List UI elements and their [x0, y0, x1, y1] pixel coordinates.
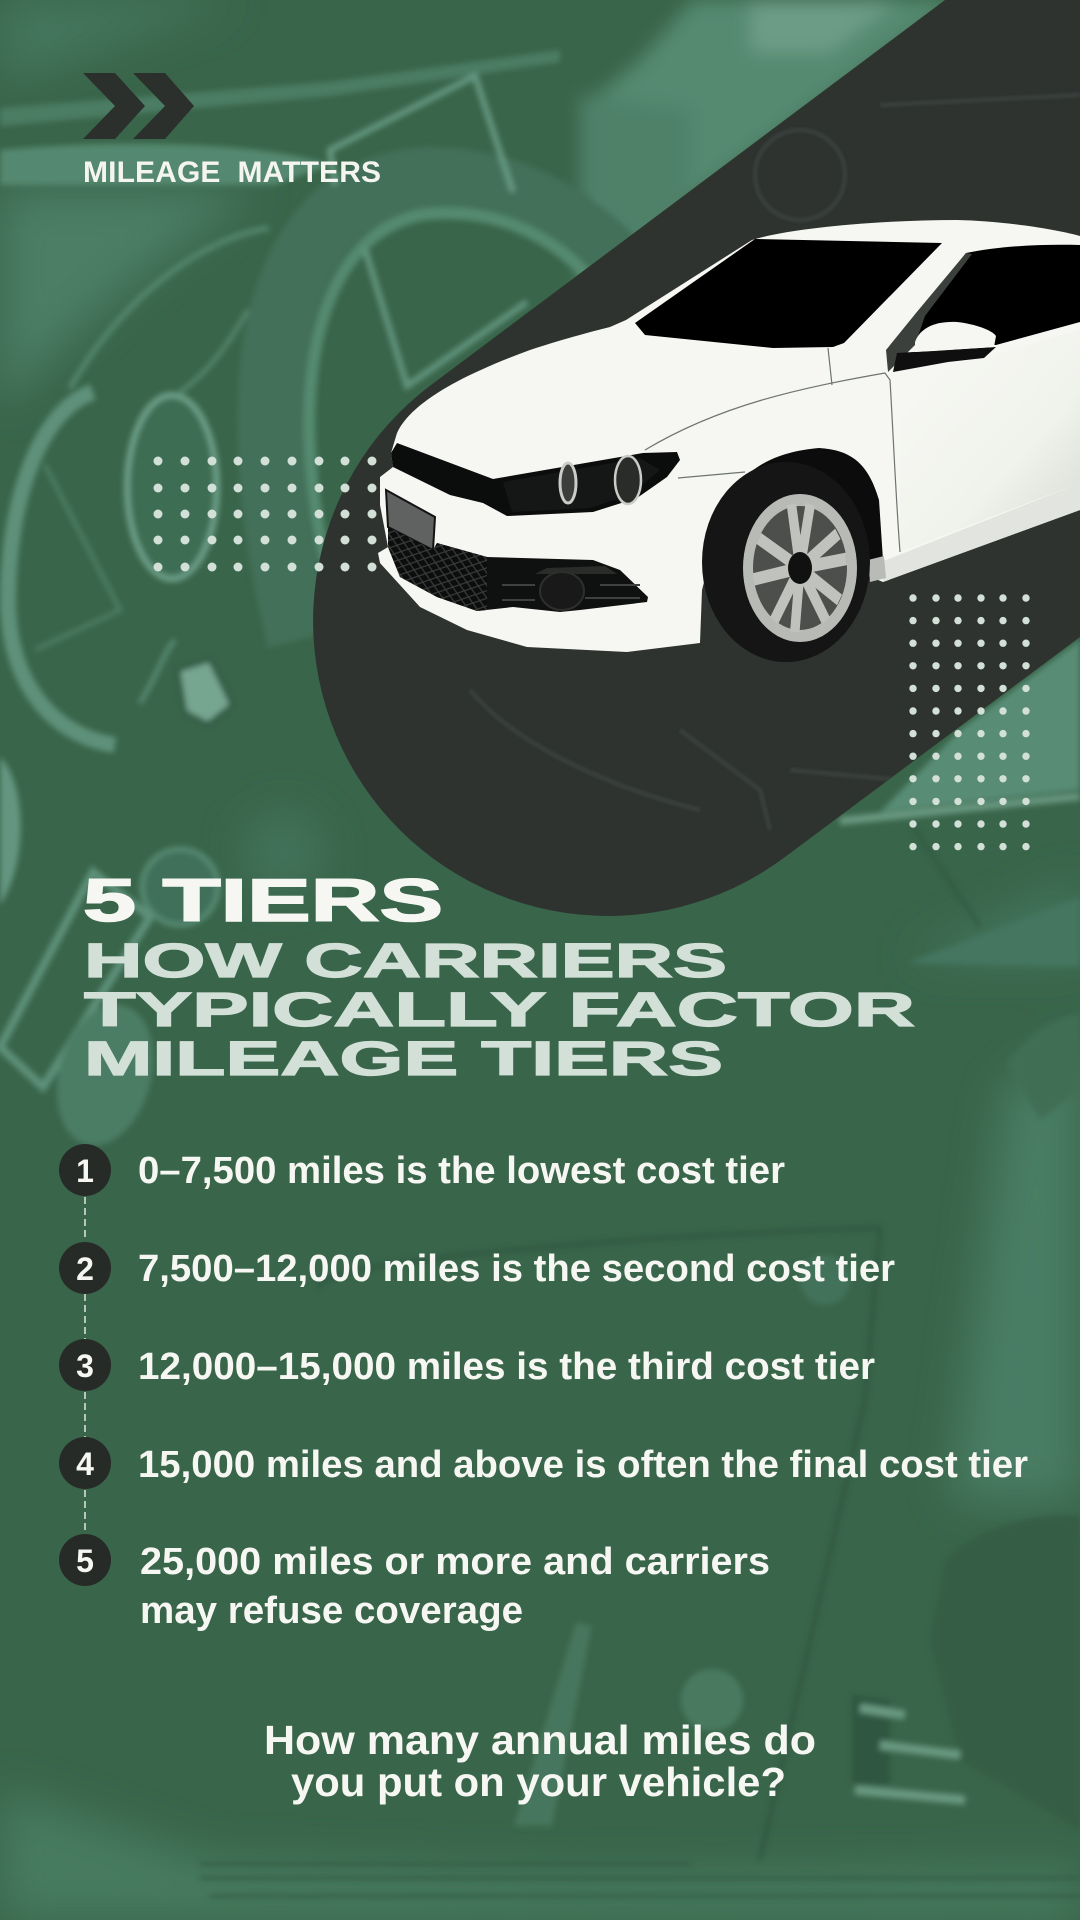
steering wheel	[270, 180, 640, 640]
tier 5: 25,000 miles or more and carriers	[140, 1541, 770, 1583]
tier 4: 15,000 miles and above is often the final cost tier	[138, 1444, 1028, 1486]
hood bar and headlight	[391, 443, 680, 516]
tyre	[702, 462, 870, 662]
wheel arch	[720, 448, 884, 610]
logo wordmark: MILEAGE MATTERS	[83, 156, 381, 189]
logo: double chevron	[83, 73, 194, 139]
tier 1: 0–7,500 miles is the lowest cost tier	[138, 1150, 785, 1192]
tier 2: 2	[76, 1251, 94, 1287]
cluster display	[35, 465, 120, 650]
gauge	[127, 395, 217, 579]
subheading: TYPICALLY FACTOR	[84, 984, 915, 1037]
closing question: How many annual miles do	[264, 1717, 816, 1763]
sill highlight	[881, 483, 1080, 582]
dot grid: left	[154, 456, 376, 572]
white car illustration	[378, 220, 1080, 662]
mud flap	[868, 556, 886, 582]
right vent wedge	[880, 640, 1080, 812]
dark diagonal capsule shape	[313, 0, 1080, 916]
tier 4: 4	[76, 1446, 94, 1482]
gauge hood crescent	[8, 392, 115, 745]
tier 3: 12,000–15,000 miles is the third cost tier	[138, 1346, 875, 1388]
top right console	[580, 0, 960, 300]
car body	[378, 220, 1080, 652]
knob	[178, 660, 232, 724]
tier 5	[59, 1534, 770, 1632]
window frame and pillar	[886, 253, 972, 372]
subheading	[84, 935, 915, 1086]
closing question	[264, 1717, 816, 1805]
dials	[142, 849, 218, 925]
subheading: HOW CARRIERS	[84, 935, 727, 988]
left oval	[0, 757, 21, 905]
subheading: MILEAGE TIERS	[84, 1033, 723, 1086]
tier 3: 3	[76, 1348, 94, 1384]
tier 5: may refuse coverage	[140, 1590, 523, 1632]
timeline connector	[84, 1197, 86, 1534]
dot grid: right	[909, 594, 1030, 850]
tier 5: 5	[76, 1543, 94, 1579]
mirror	[893, 347, 996, 372]
tier 1: 1	[76, 1153, 94, 1189]
lower grille and fog lamp	[388, 527, 648, 612]
door shading	[900, 330, 1080, 552]
side window	[915, 245, 1080, 345]
seat and floor	[1007, 1013, 1080, 1120]
rim	[743, 494, 857, 642]
windshield	[635, 239, 942, 348]
heading: 5 tiers: 5 TIERS	[83, 867, 443, 934]
body crease lines	[645, 348, 900, 552]
screen outline	[330, 76, 513, 192]
dash bands	[0, 50, 560, 126]
vent	[0, 872, 150, 1087]
tier 2: 7,500–12,000 miles is the second cost tier	[138, 1248, 895, 1290]
closing question: you put on your vehicle?	[291, 1759, 786, 1805]
license plate	[386, 490, 435, 550]
